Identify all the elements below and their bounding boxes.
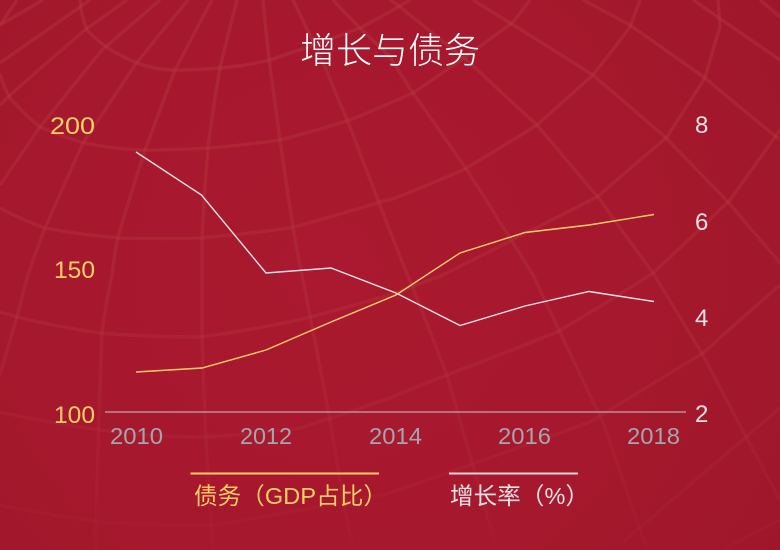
- right axis labels: growth rate: 6: [695, 209, 708, 236]
- x axis line: [105, 411, 686, 413]
- right axis labels: growth rate: [695, 112, 708, 428]
- x axis year labels: [110, 423, 680, 449]
- legend: growth rate: 增长率（%）: [450, 483, 589, 509]
- right axis labels: growth rate: 2: [695, 401, 708, 428]
- x axis year labels: 2014: [369, 423, 422, 449]
- left axis labels: debt: 100: [54, 402, 95, 429]
- left axis labels: debt: [50, 113, 95, 429]
- x axis year labels: 2010: [110, 423, 163, 449]
- legend: debt: 债务（GDP占比）: [194, 483, 387, 509]
- title: 增长与债务: [300, 22, 480, 74]
- line series: debt as share of GDP: [136, 214, 654, 372]
- x axis year labels: 2012: [240, 423, 292, 449]
- right axis labels: growth rate: 4: [695, 305, 708, 332]
- left axis labels: debt: 200: [50, 113, 95, 140]
- right axis labels: growth rate: 8: [695, 112, 708, 139]
- x axis year labels: 2016: [498, 423, 551, 449]
- line series: growth rate: [136, 152, 654, 326]
- x axis year labels: 2018: [627, 423, 680, 449]
- left axis labels: debt: 150: [54, 257, 95, 284]
